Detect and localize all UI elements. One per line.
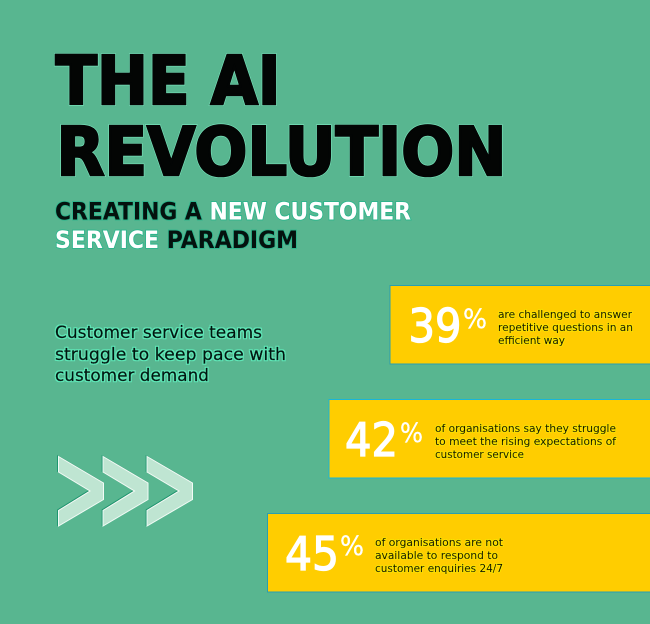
stat: 45%: 45 [285, 527, 339, 581]
panel: 42 percent [329, 400, 650, 478]
description: 42%: customer service [435, 448, 524, 461]
title: THE AI [56, 42, 280, 120]
description: 45%: available to respond to [375, 549, 498, 562]
description: 45% [375, 536, 504, 575]
description: 45%: customer enquiries 24/7 [375, 562, 503, 575]
title: REVOLUTION [56, 113, 506, 191]
description: 39%: repetitive questions in an [498, 321, 633, 334]
stat: 42%: % [400, 418, 423, 449]
panel: 45 percent [268, 514, 650, 592]
description: 42% [435, 422, 617, 461]
subtitle: CREATING A NEW CUSTOMER [55, 198, 411, 226]
subtitle [55, 198, 411, 254]
description: 42%: to meet the rising expectations of [435, 435, 617, 448]
intro text: Customer service teams [55, 323, 262, 343]
icon: triple chevrons [58, 456, 192, 526]
stat: 39%: % [463, 304, 487, 335]
subtitle: SERVICE PARADIGM [55, 226, 298, 254]
description: 39%: are challenged to answer [498, 308, 632, 321]
stat: 39%: 39 [408, 299, 462, 353]
intro text: customer demand [55, 366, 209, 386]
description: 45%: of organisations are not [375, 536, 504, 549]
title [56, 42, 506, 191]
description: 42%: of organisations say they struggle [435, 422, 616, 435]
panel: 39 percent [390, 286, 650, 364]
description: 39%: efficient way [498, 334, 565, 347]
stat: 42%: 42 [345, 413, 398, 467]
title: THE AI [56, 42, 280, 120]
intro text: struggle to keep pace with [55, 345, 286, 365]
stat: 45%: % [340, 531, 364, 562]
intro text [55, 323, 286, 386]
description: 39% [498, 308, 633, 347]
title: REVOLUTION [56, 113, 506, 191]
